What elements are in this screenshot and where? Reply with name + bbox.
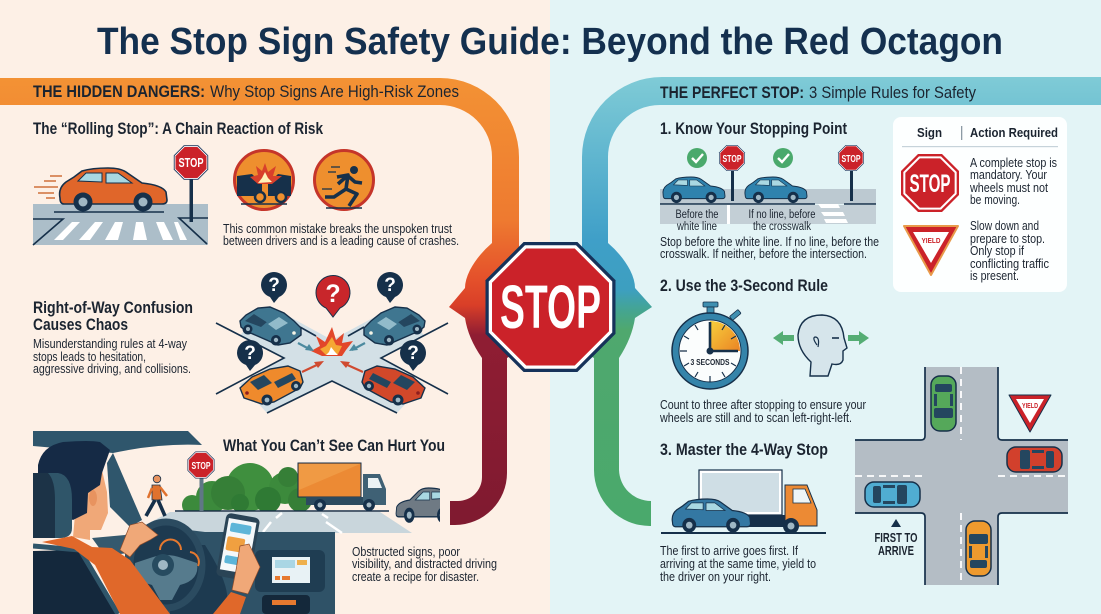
stopping labels: the crosswalk [753, 221, 811, 233]
road with crosswalk [33, 204, 208, 245]
roof and pillar [33, 431, 202, 556]
icon: stopwatch [672, 302, 748, 389]
stopping labels [676, 209, 816, 233]
text: 3-second description [659, 397, 867, 425]
text: stopping point description: crosswalk. If neither, before the intersection. [660, 246, 867, 261]
stop sign on post: STOP [178, 156, 204, 170]
heading: know your stopping point: 1. Know Your Stopping Point [660, 119, 847, 138]
text: 3-second description: Count to three after stopping to ensure your [660, 397, 867, 412]
red car [362, 366, 425, 406]
text: obstruction description: create a recipe for disaster. [352, 570, 479, 584]
stop signs: STOP [722, 154, 742, 165]
icon: running pedestrian [314, 150, 374, 210]
text: yield action: is present. [970, 268, 1019, 283]
right connector band: blue to green [570, 77, 1101, 526]
section heading: perfect stop: THE PERFECT STOP: [660, 83, 804, 102]
text: right-of-way description: Misunderstanding rules at 4-way [33, 336, 187, 351]
section heading: hidden dangers [33, 82, 459, 101]
text: stop action [969, 155, 1057, 207]
text: right-of-way description [33, 336, 191, 376]
left connector band: orange to dark red [0, 78, 530, 525]
right arrow [848, 331, 869, 345]
red car [1007, 447, 1062, 472]
background: left warm half [0, 0, 550, 614]
first to arrive label: ARRIVE [878, 543, 914, 558]
yield sign [1009, 395, 1051, 432]
phone [216, 513, 260, 581]
blue cars [663, 177, 725, 203]
motion lines [34, 176, 62, 198]
question bubbles: ? [325, 280, 341, 308]
illustration: 4-way collision [216, 272, 448, 413]
steering wheel [130, 522, 202, 608]
stop signs [719, 145, 864, 201]
blue arrows [298, 343, 365, 350]
roads [855, 367, 1068, 585]
pedestrian [146, 475, 167, 516]
text: yield action: prepare to stop. [970, 231, 1045, 246]
orange car [966, 521, 991, 576]
text: right-of-way description: aggressive driving, and collisions. [33, 361, 191, 376]
question bubbles: ? [384, 275, 396, 296]
headrest and seat [33, 473, 118, 614]
text: yield action: conflicting traffic [970, 256, 1049, 271]
table header: Action Required [970, 125, 1058, 140]
heading: rolling stop: The “Rolling Stop”: A Chain Reaction of Risk [33, 119, 323, 138]
section heading: hidden dangers: Why Stop Signs Are High-Risk Zones [210, 82, 459, 101]
question bubbles: ? [244, 343, 256, 364]
text: rolling stop description: This common mistake breaks the unspoken trust [223, 221, 452, 236]
driver torso and arm [42, 536, 170, 614]
stopping labels: white line [676, 221, 717, 233]
text: yield action: Slow down and [970, 218, 1039, 233]
question bubbles [237, 272, 426, 371]
title: The Stop Sign Safety Guide: Beyond the Red Octagon [97, 21, 1003, 63]
stop sign by road: STOP [192, 461, 211, 472]
road ahead [130, 512, 412, 533]
blue car right [364, 307, 425, 346]
text: rolling stop description [223, 221, 459, 248]
illustration: stopping point [660, 145, 876, 233]
stop sign by road [188, 452, 214, 511]
heading: 4-way stop: 3. Master the 4-Way Stop [660, 440, 828, 459]
orange car [240, 366, 303, 406]
table header [902, 125, 1058, 147]
yield sign: YIELD [1022, 403, 1038, 410]
text: 4-way description [660, 543, 816, 584]
heading: 3-second rule: 2. Use the 3-Second Rule [660, 276, 828, 295]
icon: stopwatch: 3 SECONDS [690, 357, 730, 367]
question bubbles: ? [407, 343, 419, 364]
blue car [672, 499, 751, 532]
text: 4-way description: arriving at the same time, yield to [660, 556, 816, 571]
heading: right-of-way confusion: Causes Chaos [33, 316, 128, 334]
delivery truck [298, 463, 386, 511]
panel: sign action table [893, 117, 1067, 292]
gray car obscured [396, 487, 440, 523]
text: 4-way description: The first to arrive goes first. If [660, 543, 798, 558]
text: stopping point description: Stop before the white line. If no line, before the [660, 234, 879, 249]
text: stopping point description [660, 234, 879, 261]
icon: stop sign: STOP [910, 170, 950, 198]
orange car [60, 168, 167, 212]
text: 3-second description: wheels are still and to scan left-right-left. [659, 410, 852, 425]
icon: crash [234, 150, 294, 210]
stop sign on post [174, 145, 208, 222]
road strips [660, 189, 876, 224]
green car [931, 376, 956, 431]
icon: head scanning left and right [773, 315, 869, 376]
text: rolling stop description: between drivers and is a leading cause of crashes. [223, 233, 459, 248]
icon: yield sign: YIELD [922, 236, 941, 245]
illustration: car and truck [661, 470, 826, 534]
heading: right-of-way confusion: Right-of-Way Confusion [33, 299, 193, 317]
blue car [865, 482, 920, 507]
text: obstruction description: Obstructed signs, poor [352, 545, 460, 559]
ground [661, 532, 826, 534]
driver head [38, 441, 110, 540]
first to arrive label: FIRST TO [874, 530, 918, 545]
heading: what you can't see: What You Can’t See Can Hurt You [223, 436, 445, 455]
hand holding phone [213, 544, 260, 614]
central stop sign [486, 242, 616, 372]
left arrow [773, 331, 794, 345]
red arrows [302, 363, 363, 372]
blue car left [240, 307, 301, 346]
driver hand on wheel [120, 522, 158, 557]
text: stop action: mandatory. Your [970, 167, 1048, 182]
section heading: perfect stop [660, 83, 976, 102]
crossing road [240, 306, 424, 413]
text: stop action: be moving. [970, 192, 1020, 207]
bushes [182, 463, 312, 515]
text: right-of-way description: stops leads to hesitation, [33, 349, 146, 364]
explosion [311, 327, 353, 356]
section heading: perfect stop: 3 Simple Rules for Safety [809, 83, 976, 102]
stopping labels: If no line, before [748, 209, 816, 221]
illustration: rolling stop car [33, 145, 208, 245]
stop signs: STOP [842, 154, 861, 165]
heading: right-of-way confusion [33, 299, 193, 334]
text: obstruction description [352, 545, 497, 584]
icon: yield sign [904, 226, 958, 275]
text: obstruction description: visibility, and distracted driving [352, 557, 497, 571]
text: yield action: Only stop if [970, 243, 1024, 258]
illustration: distracted driver interior [33, 431, 335, 614]
background: right cool half [550, 0, 1101, 614]
section heading: hidden dangers: THE HIDDEN DANGERS: [33, 82, 205, 101]
central stop sign: STOP [500, 273, 601, 341]
check marks [687, 148, 793, 168]
text: stop action: A complete stop is [970, 155, 1057, 170]
icon: stop sign [901, 154, 959, 212]
text: 4-way description: the driver on your right. [660, 569, 771, 584]
first to arrive label [874, 519, 918, 558]
question bubbles: ? [268, 275, 280, 296]
ground line [175, 510, 389, 512]
text: yield action [970, 218, 1049, 283]
table header: Sign [917, 125, 942, 140]
stopping labels: Before the [676, 209, 718, 221]
diagram: 4-way intersection [855, 367, 1068, 585]
truck [699, 470, 817, 534]
text: stop action: wheels must not [969, 180, 1048, 195]
dashboard [125, 524, 335, 614]
